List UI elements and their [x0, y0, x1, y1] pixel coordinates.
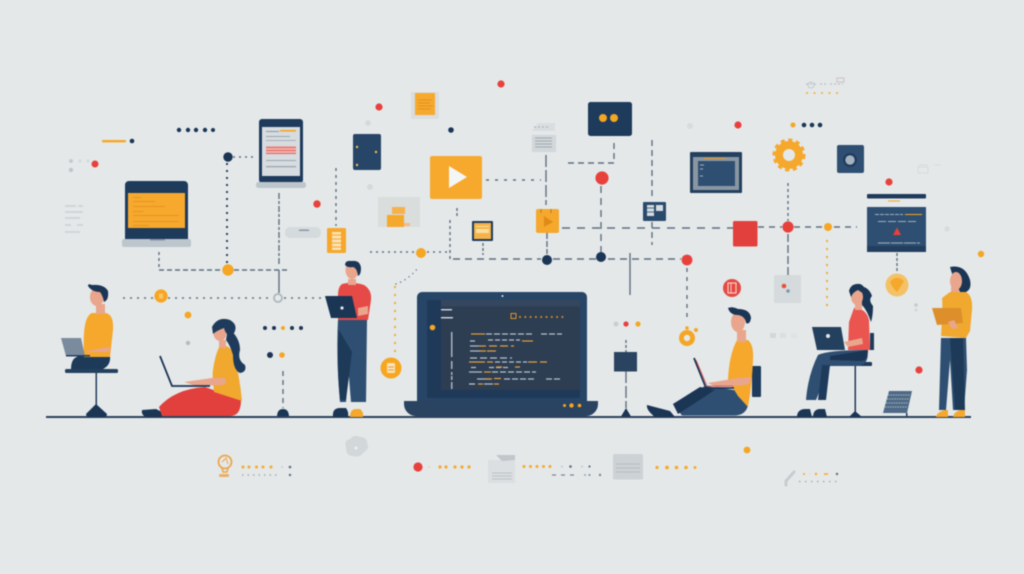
laptop: orange screen	[122, 181, 191, 247]
person: woman on chair with laptop	[797, 284, 874, 417]
icon: faint top-right chart	[806, 78, 844, 93]
icon: orange gear	[774, 140, 804, 170]
icon: small orange gear	[679, 326, 698, 346]
icon: navy card with two dots	[588, 102, 632, 136]
icon: orange coin	[154, 289, 168, 303]
ground line	[46, 416, 971, 418]
icon: red book badge	[723, 279, 741, 297]
icon: navy panel	[353, 134, 381, 170]
stool	[65, 369, 118, 417]
person: man reclining with laptop	[647, 307, 761, 417]
icon: faint cloud	[346, 436, 368, 456]
browser window with warning	[867, 194, 926, 252]
monitor: code window	[690, 152, 742, 193]
icon: video play button	[430, 156, 482, 199]
stand sign	[614, 352, 637, 416]
icon: keyboard	[883, 391, 912, 417]
bottom row: document item	[488, 455, 601, 483]
icon: small layout card	[643, 202, 666, 221]
icon: grey pin card	[774, 275, 801, 303]
person: standing man with laptop	[325, 261, 371, 417]
bottom row: pen item	[786, 472, 838, 485]
icon: navy camera square	[837, 145, 864, 173]
person: standing woman with tablet	[932, 267, 972, 417]
tablet: document	[256, 119, 306, 188]
icon: sticky note	[411, 92, 439, 119]
icon: orange code badge	[380, 358, 402, 378]
network nodes	[222, 152, 832, 417]
faint left text lines	[65, 205, 83, 233]
central laptop with code	[404, 292, 598, 416]
code lines	[469, 334, 562, 384]
orange dotted connectors	[395, 241, 827, 352]
icon: orange play folder	[536, 209, 559, 233]
icon: document stack	[532, 123, 556, 152]
faint grey squares	[770, 333, 797, 338]
bottom row: grey panel item	[613, 454, 696, 480]
icon: orange window	[472, 221, 493, 241]
person: woman sitting on floor with laptop	[142, 319, 245, 417]
scattered dots	[69, 80, 984, 453]
icon: orange globe	[886, 274, 908, 296]
icon: red square	[733, 221, 758, 246]
icon: folder card	[378, 197, 420, 227]
icon: faint right window	[918, 165, 941, 173]
connector network	[123, 140, 897, 408]
person: man on stool with laptop	[61, 284, 118, 417]
icon: orange calculator	[327, 228, 346, 253]
bottom row: lightbulb item	[218, 456, 291, 477]
bottom row: red dot item	[413, 462, 471, 472]
icon: grey pill	[285, 227, 321, 238]
